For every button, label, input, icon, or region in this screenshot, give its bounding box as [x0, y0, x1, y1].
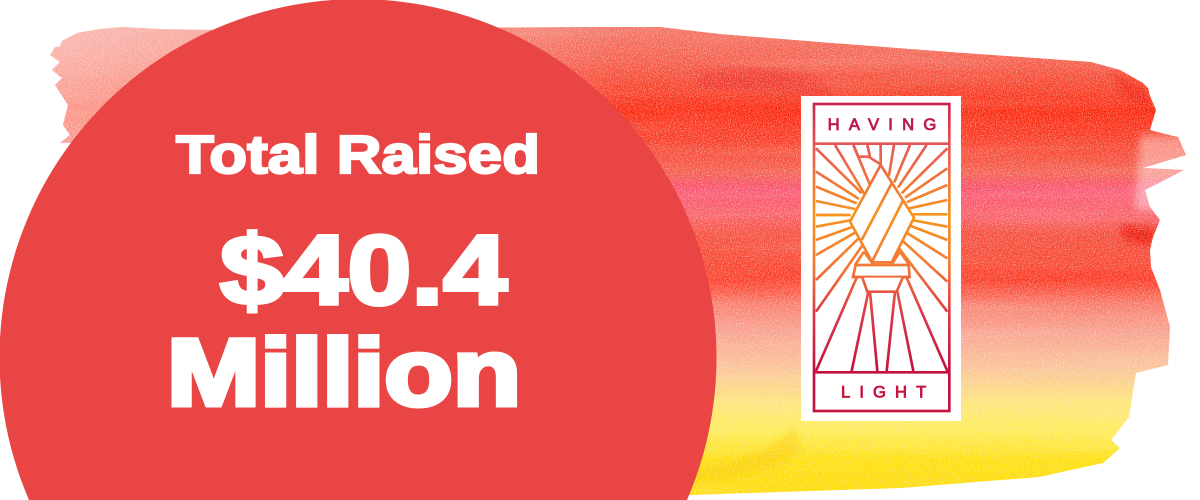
- amount: $40.4 Million: $40.4: [220, 215, 507, 325]
- flame diamond: [850, 145, 914, 262]
- logo frame: [814, 104, 949, 411]
- amount: $40.4 Million: [167, 215, 521, 426]
- logo: Having Light torch: [801, 96, 961, 421]
- torch body: [816, 252, 947, 371]
- logo word: HAVING: HAVING: [828, 115, 936, 134]
- logo word: LIGHT: LIGHT: [841, 383, 926, 402]
- amount: $40.4 Million: Million: [167, 320, 521, 426]
- sun rays: [816, 145, 947, 312]
- heading: Total Raised: Total Raised: [176, 125, 540, 185]
